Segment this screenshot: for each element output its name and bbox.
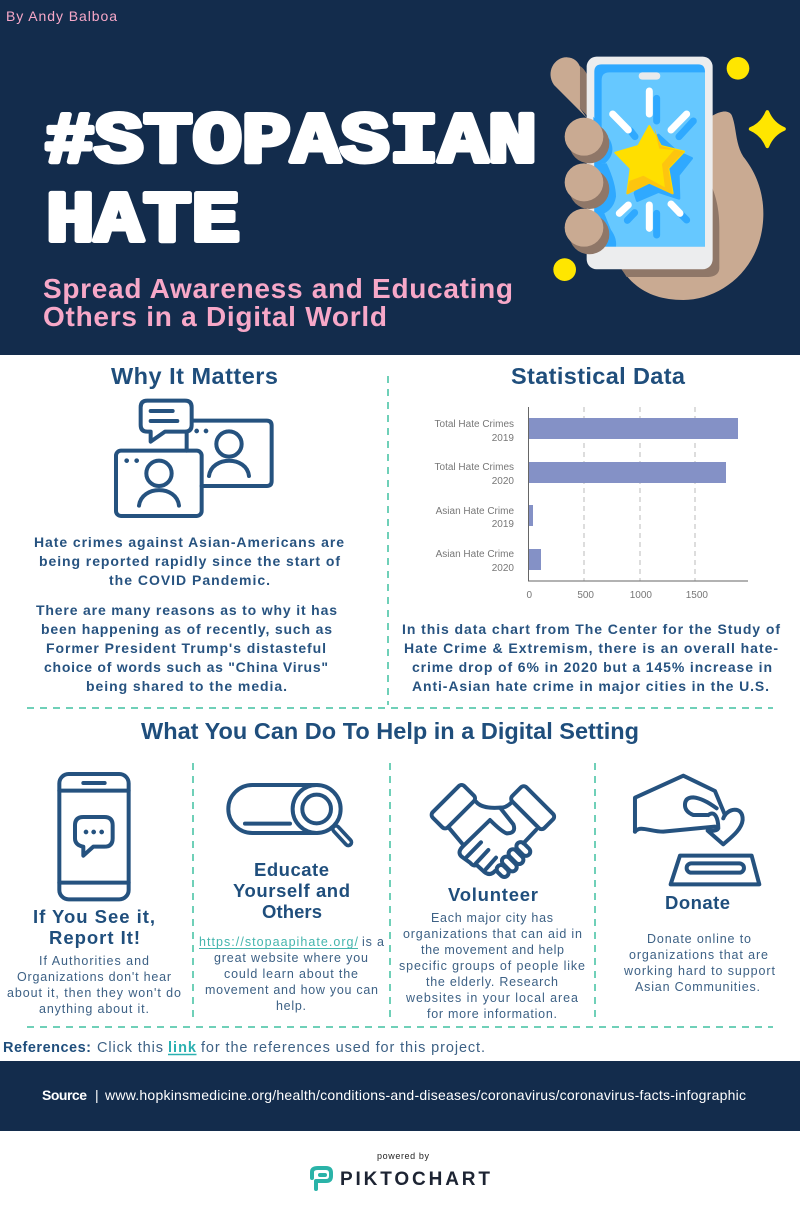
text: educate: is a	[362, 935, 384, 949]
text: educate	[199, 935, 384, 1013]
text: why it matters: being shared to the media.	[86, 678, 287, 694]
title: donate: Donate	[665, 892, 730, 913]
text: volunteer: Each major city has	[431, 911, 553, 925]
text: report it: Organizations don't hear	[17, 970, 171, 984]
text: why it matters: been happening as of recently, such as	[41, 621, 332, 637]
text: volunteer: organizations that can aid in	[403, 927, 582, 941]
text: volunteer: websites in your local area	[405, 991, 578, 1005]
text: volunteer	[399, 911, 585, 1021]
bar chart: 1000	[630, 590, 652, 601]
panel: piktochart branding	[312, 1151, 490, 1190]
icon: piktochart logo	[312, 1168, 331, 1189]
panel: piktochart branding: powered by	[377, 1151, 430, 1161]
panel: source footer: www.hopkinsmedicine.org/health/conditions-and-diseases/coronavirus/coronavirus-facts-infographic	[104, 1087, 746, 1103]
references: Click this	[97, 1040, 163, 1056]
text: chart description	[402, 621, 780, 694]
references: for the references used for this project.	[201, 1040, 485, 1056]
bar chart: 1500	[686, 590, 708, 601]
heading: what you can do: What You Can Do To Help in a Digital Setting	[141, 718, 639, 744]
text: educate: movement and how you can	[205, 983, 378, 997]
text: donate: working hard to support	[623, 964, 776, 978]
text: why it matters: There are many reasons as to why it has	[36, 602, 337, 618]
text: volunteer: for more information.	[427, 1007, 557, 1021]
title: volunteer: Volunteer	[448, 884, 538, 905]
panel: piktochart branding: PIKTOCHART	[340, 1169, 490, 1190]
bar chart: Total Hate Crimes	[435, 419, 514, 430]
text: volunteer: the elderly. Research	[426, 975, 558, 989]
text: report it	[7, 954, 181, 1016]
bar chart: 2019	[492, 519, 514, 530]
text: donate: organizations that are	[629, 948, 768, 962]
text: chart description: Anti-Asian hate crime in major cities in the U.S.	[412, 678, 769, 694]
text: why it matters: Former President Trump's distasteful	[46, 640, 326, 656]
references: link	[168, 1040, 197, 1056]
bar chart: Asian Hate Crime	[436, 506, 514, 517]
icon: phone with chat bubble	[59, 774, 129, 899]
title: report it: Report It!	[49, 927, 140, 948]
bar chart: 2019	[492, 433, 514, 444]
text: why it matters: Hate crimes against Asian-Americans are	[34, 534, 344, 550]
text: chart description: In this data chart from The Center for the Study of	[402, 621, 780, 637]
text: volunteer: the movement and help	[421, 943, 564, 957]
icon: video chat	[116, 401, 272, 516]
panel: source footer: |	[95, 1087, 99, 1103]
text: chart description: Hate Crime & Extremism, there is an overall hate-	[404, 640, 778, 656]
text: donate	[623, 932, 776, 994]
text: educate: could learn about the	[224, 967, 358, 981]
panel: volunteer	[399, 783, 585, 1021]
text: why it matters: being reported rapidly since the start of	[39, 553, 340, 569]
bar chart: 0	[526, 590, 532, 601]
heading: statistical data: Statistical Data	[511, 363, 686, 389]
text: why it matters: the COVID Pandemic.	[109, 572, 270, 588]
bar chart: Total Hate Crimes	[435, 462, 514, 473]
text: why it matters: choice of words such as "China Virus"	[44, 659, 328, 675]
title: educate: Yourself and	[233, 880, 350, 901]
bar chart: 2020	[492, 563, 514, 574]
panel: statistical data	[402, 363, 780, 694]
title	[45, 104, 537, 262]
panel: header	[0, 0, 800, 355]
panel: donate	[623, 776, 776, 994]
panel: source footer	[0, 1061, 800, 1131]
references: References:	[3, 1040, 91, 1056]
subtitle: Others in a Digital World	[43, 301, 387, 332]
text: educate: great website where you	[214, 951, 368, 965]
icon: search bar	[228, 785, 348, 842]
text: report it: anything about it.	[39, 1002, 149, 1016]
icon: handshake	[430, 783, 556, 879]
subtitle: Spread Awareness and Educating	[43, 273, 513, 304]
title: educate	[233, 859, 350, 922]
text: donate: Donate online to	[647, 932, 751, 946]
title: educate: Others	[262, 901, 322, 922]
bar chart	[435, 407, 748, 601]
text: report it: about it, then they won't do	[7, 986, 181, 1000]
panel: why it matters	[34, 363, 344, 694]
text: donate: Asian Communities.	[635, 980, 760, 994]
subtitle	[43, 273, 513, 332]
text: educate: help.	[276, 999, 306, 1013]
text: why it matters	[34, 534, 344, 694]
icon: hand dropping heart	[635, 776, 759, 884]
bar chart: Asian Hate Crime	[436, 549, 514, 560]
title: educate: Educate	[254, 859, 329, 880]
references	[3, 1040, 485, 1056]
byline: By Andy Balboa	[6, 8, 117, 24]
title: #STOPASIAN	[45, 104, 537, 184]
title: report it: If You See it,	[33, 906, 155, 927]
bar chart: 500	[577, 590, 594, 601]
text: chart description: crime drop of 6% in 2020 but a 145% increase in	[412, 659, 772, 675]
panel: educate yourself	[199, 785, 384, 1013]
panel: source footer: Source	[42, 1087, 87, 1103]
title: HATE	[46, 182, 240, 262]
title: report it	[33, 906, 155, 948]
bar chart: 2020	[492, 476, 514, 487]
text: educate: https://stopaapihate.org/	[199, 935, 359, 949]
panel: report it	[7, 774, 181, 1016]
text: volunteer: specific groups of people like	[399, 959, 585, 973]
icon: hand holding phone with star	[551, 57, 784, 300]
heading: why it matters: Why It Matters	[111, 363, 278, 389]
text: report it: If Authorities and	[39, 954, 149, 968]
